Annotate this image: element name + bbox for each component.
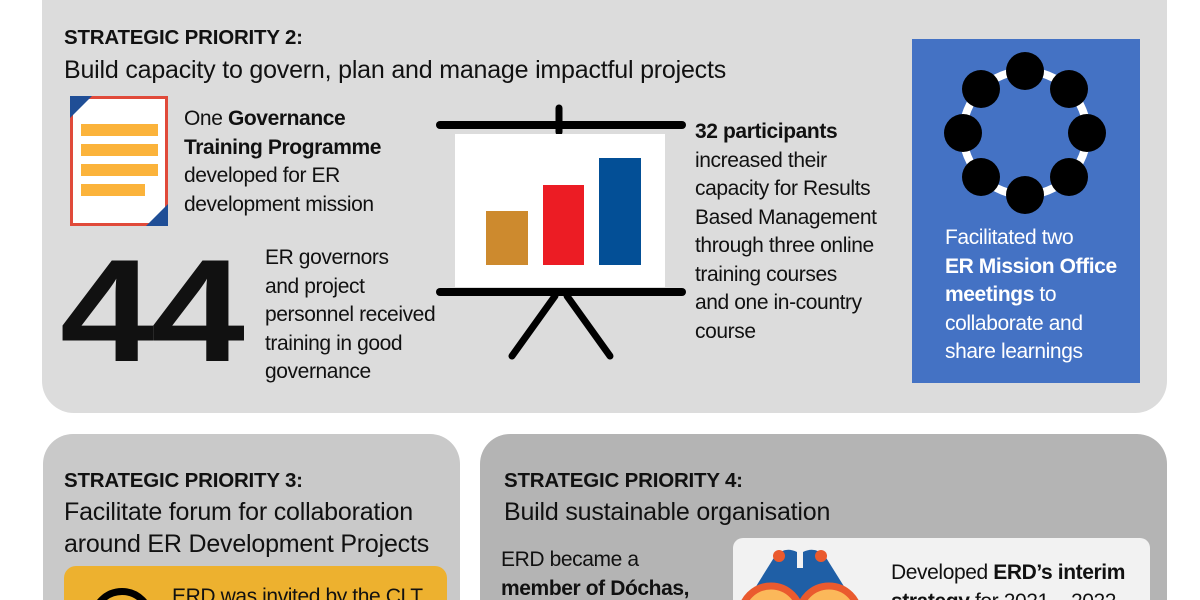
text: governors trained: governance [265, 360, 371, 383]
text: governors trained [265, 246, 435, 383]
text: 32 participants: 32 participants [695, 120, 837, 143]
text: 32 participants: increased their [695, 148, 827, 172]
text: 32 participants: capacity for Results [695, 177, 870, 200]
icon: presentation easel chart [436, 104, 686, 360]
text: 32 participants: through three online [695, 234, 874, 257]
subtitle: priority 3: around ER Development Projects [64, 530, 429, 558]
text: governance programme: Training Programme [184, 136, 381, 158]
text: mission office meetings: Facilitated two [945, 226, 1073, 249]
text: Dochas membership: member of Dóchas, [501, 576, 689, 600]
text: mission office meetings: meetings to [945, 283, 1056, 306]
icon: ring [90, 588, 154, 600]
text: governors trained: training in good [265, 332, 402, 354]
callout: CLT invitation [64, 566, 447, 600]
text: 32 participants: course [695, 320, 756, 342]
text: governance programme: development mission [184, 192, 374, 216]
text: governance programme [184, 107, 381, 216]
text: governance programme: developed for ER [184, 164, 340, 187]
text: 32 participants: training courses [695, 262, 837, 286]
text: 32 participants: Based Management [695, 206, 877, 228]
text: mission office meetings: share learnings [945, 340, 1083, 363]
text: interim strategy [891, 561, 1125, 600]
subtitle: priority 4: Build sustainable organisation [504, 498, 830, 526]
text: mission office meetings: ER Mission Office [945, 254, 1117, 278]
icon: binoculars [742, 550, 858, 600]
subtitle: priority 3: Facilitate forum for collaboration [64, 498, 413, 526]
text: governors trained: personnel received [265, 303, 435, 326]
big number 44: 44 [60, 229, 241, 392]
text: Dochas membership: ERD became a [501, 548, 639, 571]
heading: priority 2: STRATEGIC PRIORITY 2: [64, 26, 303, 49]
text: governors trained: ER governors [265, 246, 389, 269]
panel: strategic priority 3 [43, 434, 460, 600]
panel: strategic priority 4 [480, 434, 1167, 600]
icon: document [70, 96, 168, 226]
text: 32 participants: and one in-country [695, 291, 862, 314]
text: mission office meetings: collaborate and [945, 312, 1083, 334]
text: Dochas membership [501, 548, 689, 600]
panel: mission office meetings [912, 39, 1140, 383]
text: governance programme: One Governance [184, 107, 345, 130]
subtitle: priority 3 [64, 498, 429, 558]
subtitle: priority 2: Build capacity to govern, plan and manage impactful projects [64, 56, 726, 84]
text: mission office meetings [945, 226, 1117, 363]
text: 32 participants [695, 120, 877, 342]
panel: strategic priority 2 [42, 0, 1167, 413]
callout: interim strategy [733, 538, 1150, 600]
icon: circle of people [944, 52, 1106, 214]
text: governors trained: and project [265, 274, 365, 298]
heading: priority 3: STRATEGIC PRIORITY 3: [64, 469, 303, 492]
text: interim strategy: Developed ERD’s interim [891, 561, 1125, 584]
heading: priority 4: STRATEGIC PRIORITY 4: [504, 469, 743, 492]
